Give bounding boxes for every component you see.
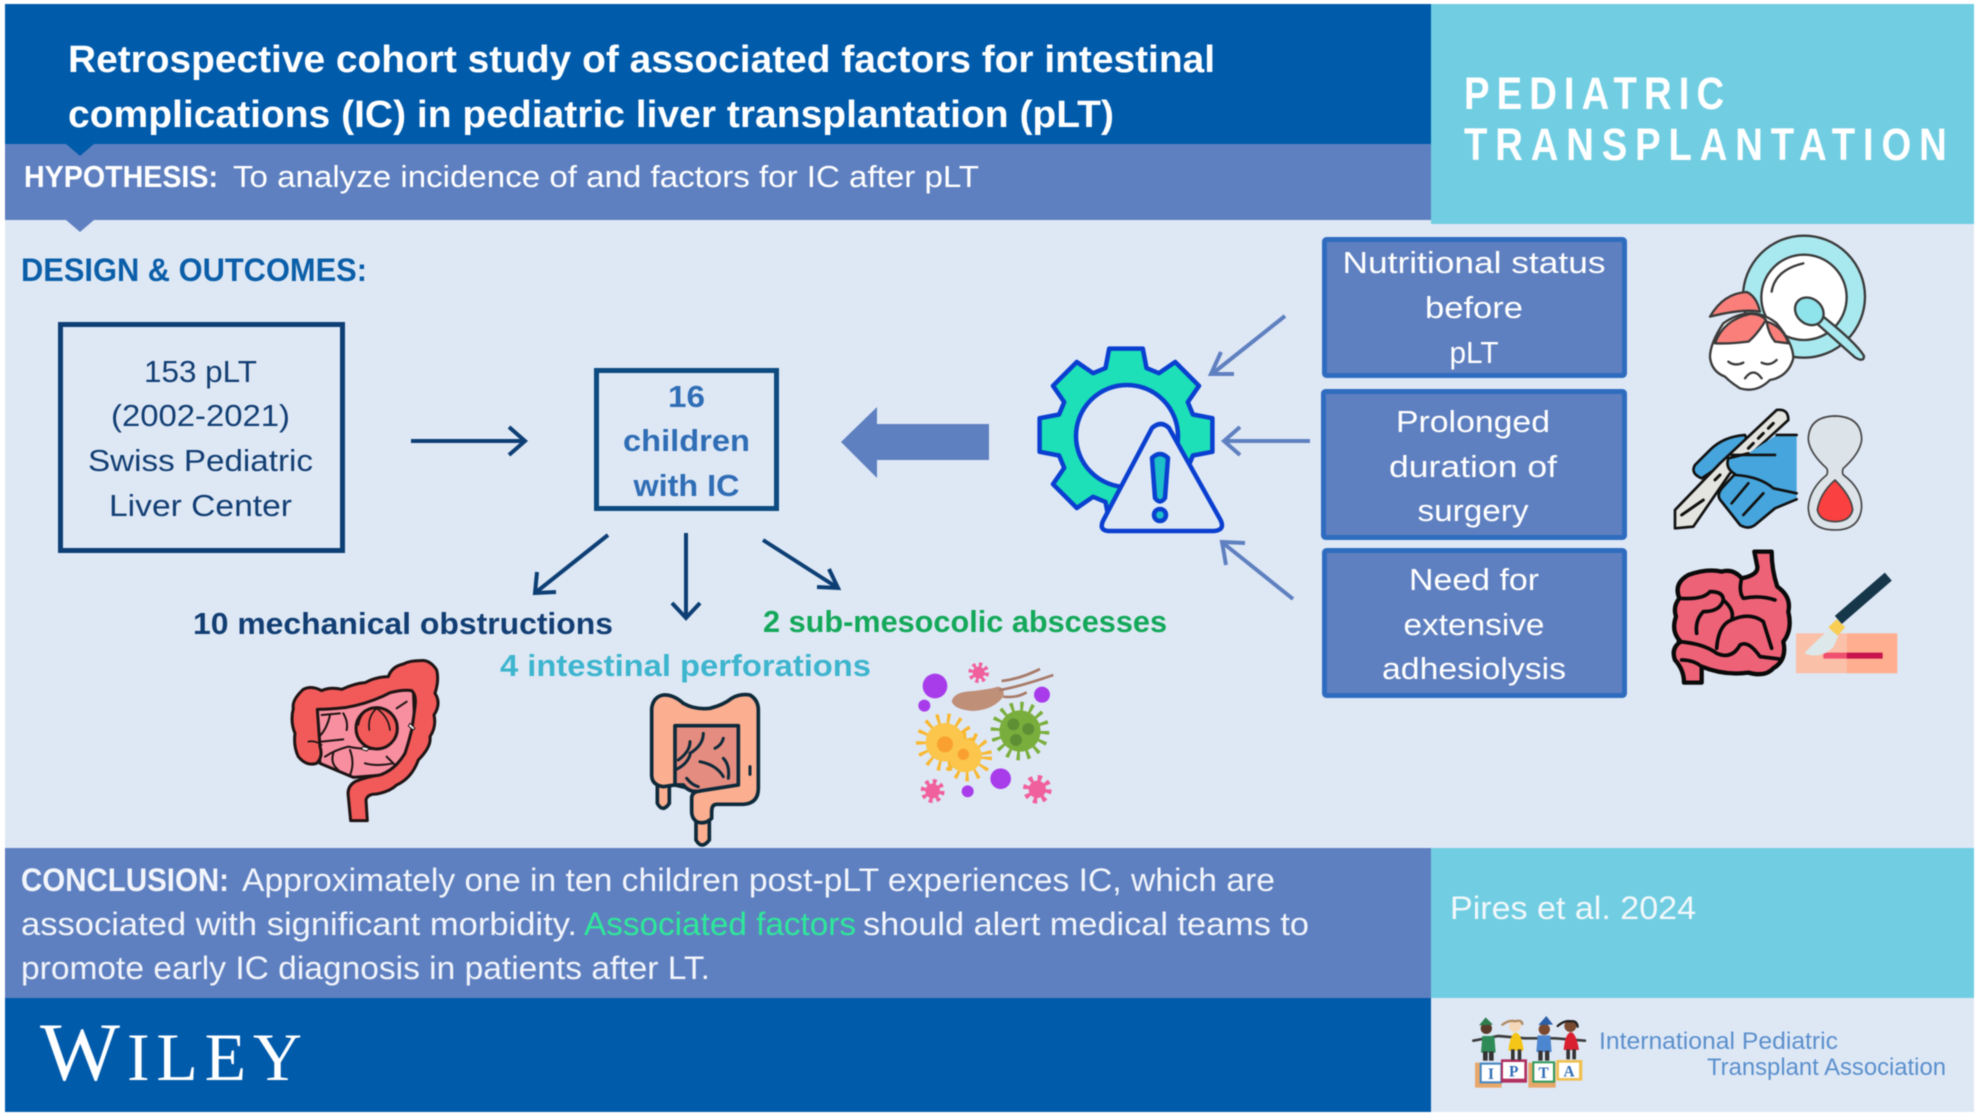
box: prolonged surgery: Prolonged <box>1396 404 1550 439</box>
icon: hourglass <box>1808 416 1862 530</box>
text: IPTA name: International Pediatric <box>1599 1028 1838 1055</box>
hypothesis text: To analyze incidence of and factors for IC after pLT <box>233 159 979 194</box>
block: T: T <box>1539 1065 1549 1082</box>
box: 153 pLT cohort: Swiss Pediatric <box>88 443 313 478</box>
box: 16 children with IC: with IC <box>632 468 740 503</box>
conclusion text: Approximately one in ten children post-pLT experiences IC, which are <box>242 862 1275 898</box>
arrow: to intestinal perforations <box>672 533 700 618</box>
box: prolonged surgery: duration of <box>1389 449 1557 484</box>
box: nutritional status: pLT <box>1450 335 1499 370</box>
text: IPTA name <box>1599 1028 1946 1081</box>
arrow: duration to factors <box>1224 427 1310 455</box>
box: nutritional status: before <box>1425 290 1523 325</box>
Wiley logo <box>40 1006 302 1098</box>
title <box>68 39 1215 136</box>
panel: title band <box>5 4 1431 144</box>
Wiley logo: W <box>40 1006 121 1098</box>
icon: incision and scalpel <box>1796 577 1897 673</box>
box: 16 children with IC: children <box>623 423 750 458</box>
arrow: to abscesses <box>763 540 838 588</box>
box: extensive adhesiolysis: Need for <box>1409 562 1539 597</box>
icon: sad child and plate <box>1710 236 1865 390</box>
conclusion text: promote early IC diagnosis in patients after LT. <box>21 950 710 986</box>
panel: hypothesis band <box>5 144 1431 232</box>
panel: IPTA footer <box>1431 998 1974 1112</box>
box: 16 children with IC: 16 <box>668 379 705 414</box>
text: IPTA name: Transplant Association <box>1707 1054 1946 1081</box>
journal title <box>1464 68 1947 170</box>
label: mechanical obstructions: 10 mechanical obstructions <box>193 606 613 641</box>
arrow: nutrition to factors <box>1211 316 1285 374</box>
box: prolonged surgery: surgery <box>1418 493 1529 528</box>
box: nutritional status: Nutritional status <box>1342 245 1606 280</box>
conclusion text: should alert medical teams to <box>863 906 1309 942</box>
icon: bacteria and viruses <box>918 666 1053 799</box>
title: complications (IC) in pediatric liver transplantation (pLT) <box>68 94 1114 136</box>
label: sub-mesocolic abscesses: 2 sub-mesocolic abscesses <box>763 604 1167 639</box>
conclusion text <box>21 862 1309 986</box>
box: extensive adhesiolysis <box>1324 550 1624 696</box>
citation text: Pires et al. 2024 <box>1450 890 1696 926</box>
hypothesis text: HYPOTHESIS: <box>24 159 218 194</box>
icon: gear with warning triangle <box>1040 349 1222 531</box>
panel: journal name <box>1431 4 1974 224</box>
panel: conclusion <box>5 848 1431 998</box>
icon: colon with obstruction <box>292 661 438 821</box>
label: intestinal perforations: 4 intestinal perforations <box>500 648 871 683</box>
arrow: cohort to children <box>411 427 525 455</box>
box: extensive adhesiolysis: extensive <box>1404 607 1544 642</box>
arrow: adhesiolysis to factors <box>1222 542 1293 599</box>
box: 153 pLT cohort: Liver Center <box>109 488 292 523</box>
box: 153 pLT cohort <box>60 324 342 550</box>
Wiley logo: ILEY <box>127 1019 302 1095</box>
box: 153 pLT cohort: (2002-2021) <box>111 398 290 433</box>
box: nutritional status <box>1324 240 1624 376</box>
heading: design and outcomes: DESIGN & OUTCOMES: <box>21 252 367 288</box>
block: A: A <box>1563 1063 1575 1080</box>
icon: small intestine <box>1674 552 1790 683</box>
icon: gloved hand with scalpel <box>1675 410 1797 528</box>
icon: colon with perforation <box>652 695 758 845</box>
journal title: PEDIATRIC <box>1464 68 1724 119</box>
conclusion text: associated with significant morbidity. <box>21 906 577 942</box>
journal title: TRANSPLANTATION <box>1464 119 1947 170</box>
conclusion text: CONCLUSION: <box>21 862 229 898</box>
conclusion text: Associated factors <box>584 906 856 942</box>
title: Retrospective cohort study of associated factors for intestinal <box>68 39 1215 81</box>
panel: main background <box>5 220 1974 848</box>
box: 153 pLT cohort: 153 pLT <box>144 354 257 389</box>
block: P: P <box>1509 1064 1518 1081</box>
panel: Wiley footer <box>5 998 1431 1112</box>
children figures <box>1473 1016 1585 1061</box>
arrow: factors to children <box>841 407 989 478</box>
box: prolonged surgery <box>1324 392 1624 538</box>
arrow: to mechanical obstructions <box>535 535 608 593</box>
icon: IPTA children on blocks <box>1473 1016 1585 1088</box>
block: I: I <box>1488 1066 1494 1083</box>
panel: citation <box>1431 848 1974 998</box>
box: extensive adhesiolysis: adhesiolysis <box>1382 651 1566 686</box>
box: 16 children with IC <box>596 370 776 508</box>
